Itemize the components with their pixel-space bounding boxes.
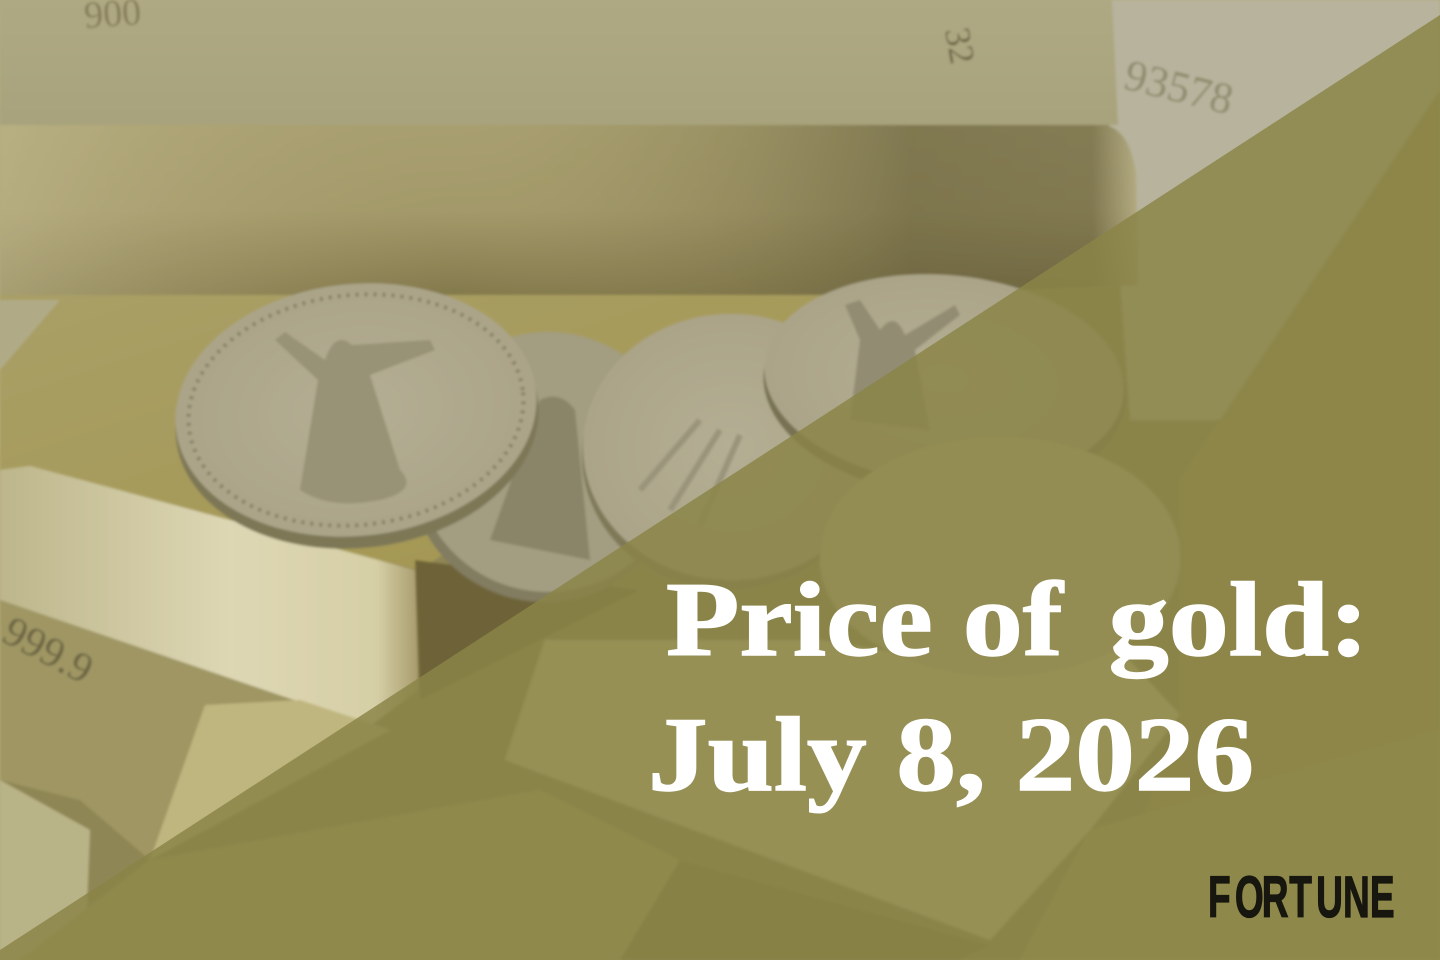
title xyxy=(648,561,1369,813)
coin: liberty centre xyxy=(582,314,879,591)
gold bar: middle left xyxy=(0,295,830,726)
gold bar: lower left xyxy=(0,600,390,960)
coin: lower, under overlay xyxy=(820,437,1180,673)
pale bar at top right xyxy=(1100,0,1440,420)
title line 1: Price of gold: xyxy=(666,561,1369,678)
gold bar: top: 93578 xyxy=(1120,50,1238,124)
gold bar: top: 32 xyxy=(937,24,983,67)
coin: liberty left xyxy=(163,266,551,566)
Fortune logo: FORTUNE xyxy=(1208,866,1395,930)
coin: liberty right xyxy=(754,260,1136,511)
title line 2: July 8, 2026 xyxy=(648,696,1254,813)
coin: liberty behind xyxy=(409,332,681,602)
gold bar: top xyxy=(0,0,1238,295)
